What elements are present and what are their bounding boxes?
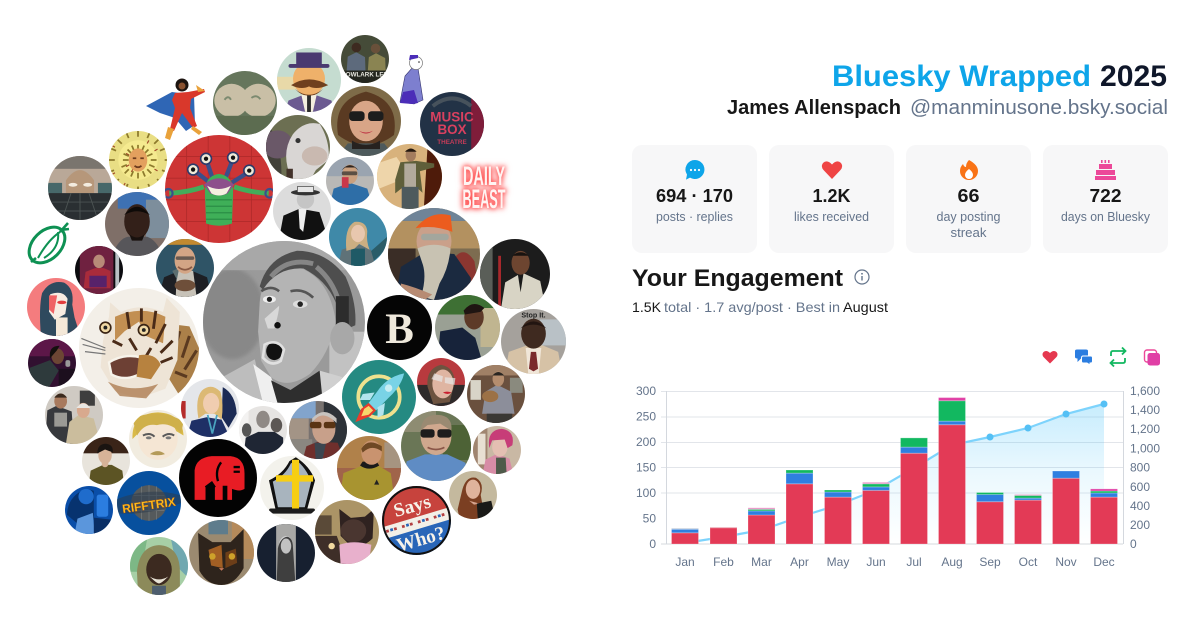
right axis labels: 1,400 [1130,403,1160,417]
right axis labels [1130,384,1160,551]
icon: reposts [1110,348,1126,366]
month labels: Apr [790,555,809,569]
month labels [675,555,1115,569]
month labels: Jul [906,555,922,569]
left axis labels [636,384,656,551]
right axis labels: 200 [1130,518,1150,532]
panel: likes received: likes received [794,210,869,224]
icon: likes [1042,351,1058,364]
right axis labels: 600 [1130,480,1150,494]
cumulative line [685,400,1108,543]
avatar cluster: BEAST [462,184,506,214]
avatar: concert photo on black [75,246,123,294]
icon: heart [822,161,842,179]
right axis labels: 400 [1130,499,1150,513]
user name and handle: @manminusone.bsky.social [910,97,1168,119]
avatar: woman with white glasses, red background [417,358,465,406]
user name and handle [727,97,1168,119]
avatar: yellow haired man drawing [129,410,187,468]
avatar: elephant logo on black [179,439,257,517]
avatar: bald man with glasses [156,239,214,297]
avatar: man in white suit [480,239,550,309]
avatar: people from behind [239,406,287,454]
avatar: RiffTrax logo [117,471,181,535]
avatar: man with dog [467,365,525,423]
panel: posting streak [906,145,1031,253]
avatar: rocket logo [342,360,416,434]
avatar: selfie man in hoodie [105,192,169,256]
left axis labels: 250 [636,410,656,424]
icon: flame [960,160,978,180]
bar chart: monthly engagement [636,384,1160,569]
avatar: Says Who button: Who? [394,523,448,557]
avatar: Says Who button: Says [391,491,434,522]
icon: info [855,270,869,284]
left axis labels: 100 [636,486,656,500]
panel: posting streak: streak [950,226,987,240]
avatar: two men [45,386,103,444]
left axis labels: 300 [636,384,656,398]
avatar: music box theatre sign [420,92,484,156]
title: 2025 [1100,60,1167,93]
month labels: Nov [1055,555,1077,569]
avatar: man with sunglasses [289,401,347,459]
chart legend icons [1042,348,1160,366]
panel: likes received [769,145,894,253]
left axis labels: 150 [636,460,656,474]
right axis labels: 800 [1130,460,1150,474]
panel: posting streak: 66 [958,186,980,206]
panel: days on Bluesky: 722 [1090,186,1122,206]
avatar: blonde woman, teal background [329,208,387,266]
right axis labels: 1,200 [1130,422,1160,436]
panel: posting streak: day posting [936,210,1001,224]
avatar: woman with microphone [28,339,76,387]
avatar: Says Who button [382,486,451,555]
month labels: Sep [979,555,1001,569]
avatar: B logo on black [367,295,432,360]
avatar: superhero illustration [146,78,205,140]
avatar: hat and moustache cartoon [277,48,341,112]
avatar: fists [213,71,277,135]
avatar: man in brown suit [82,437,130,485]
cumulative line area [685,404,1104,544]
icon: replies [1075,350,1092,365]
avatar: Daily Beast logo: DAILY [463,161,505,191]
avatar: siamese cat [315,500,379,564]
left axis labels: 50 [643,512,656,526]
month labels: Oct [1019,555,1038,569]
avatar: green monster on red tiles [165,135,273,243]
avatar: music box theatre sign: BOX [437,122,467,137]
month labels: Dec [1093,555,1115,569]
avatar: wizard cartoon [400,55,423,104]
avatar cluster [22,35,566,595]
avatar: woman with curly hair and sunglasses [331,86,401,156]
left axis labels: 200 [636,435,656,449]
avatar: music box theatre sign: MUSIC [430,109,474,124]
avatar: woman in narrow grey strip on dark [257,524,315,582]
avatar: onion logo [22,220,72,270]
heading: your engagement: Your Engagement [632,265,843,292]
engagement summary: August [843,299,888,315]
avatar: blonde woman with lanyard [181,379,239,437]
month labels: Jan [675,555,695,569]
month labels: May [827,555,849,569]
avatar: RiffTrax logo: RIFFTRIX [121,495,176,516]
month labels: Feb [713,555,734,569]
panel: days on Bluesky: days on Bluesky [1061,210,1151,224]
avatar: man looking down [435,295,500,360]
avatar: tiger drawing [79,288,199,408]
left axis labels: 0 [649,537,656,551]
month labels: Aug [941,555,963,569]
avatar: Daily Beast logo [462,161,506,214]
avatar: man in hat, black and white [273,182,331,240]
avatar: red-haired woman [449,471,497,519]
right axis labels: 1,000 [1130,442,1160,456]
panel: posts and replies: posts · replies [656,210,733,224]
avatar: man in suit with Stop It caption: Stop It. [521,311,546,319]
title: Bluesky Wrapped [832,60,1091,93]
avatar: Captain Kirk [337,436,401,500]
engagement summary: 1.5K [632,299,662,315]
avatar: red woman illustration [27,278,85,336]
panel: posts and replies [632,145,757,253]
avatar: pink hair woman [473,426,521,474]
bars [672,398,1118,544]
engagement summary: total · 1.7 avg/post · Best in [664,299,840,315]
engagement summary [632,299,888,315]
user name and handle: James Allenspach [727,97,901,119]
right axis labels: 1,600 [1130,384,1160,398]
avatar: sun-burst face [109,131,167,189]
panel: likes received: 1.2K [812,186,850,206]
avatar: blue-tinted woman selfie [65,486,113,534]
avatar: B logo on black: B [385,306,414,353]
avatar: dome building [48,156,112,220]
avatar: surprised man, black and white portrait [203,241,365,403]
month labels: Jun [866,555,886,569]
avatar: men with caption strip: DOWLARK LEM [341,71,389,78]
avatar: tortoiseshell cat [189,520,254,585]
avatar: man in suit with Stop It caption [501,309,566,374]
avatar: man with glasses in blue shirt [401,411,471,481]
avatar: blue sweater man [326,157,374,205]
month labels: Mar [751,555,772,569]
avatar: sculpture creature [266,115,330,179]
avatar: mitre with cross [260,456,324,520]
avatar: music box theatre sign: THEATRE [437,139,467,146]
icon: quotes [1144,350,1160,366]
icon: chat bubble [686,160,704,180]
avatar: man in green hood [130,537,188,595]
avatar: man in olive jacket [377,144,442,209]
avatar: man with orange cap and long beard [388,208,480,300]
icon: cake [1095,160,1116,180]
right axis labels: 0 [1130,537,1137,551]
avatar: men with caption strip [341,35,389,83]
chart grid [661,391,1124,544]
panel: posts and replies: 694 · 170 [656,186,733,206]
panel: days on Bluesky [1043,145,1168,253]
